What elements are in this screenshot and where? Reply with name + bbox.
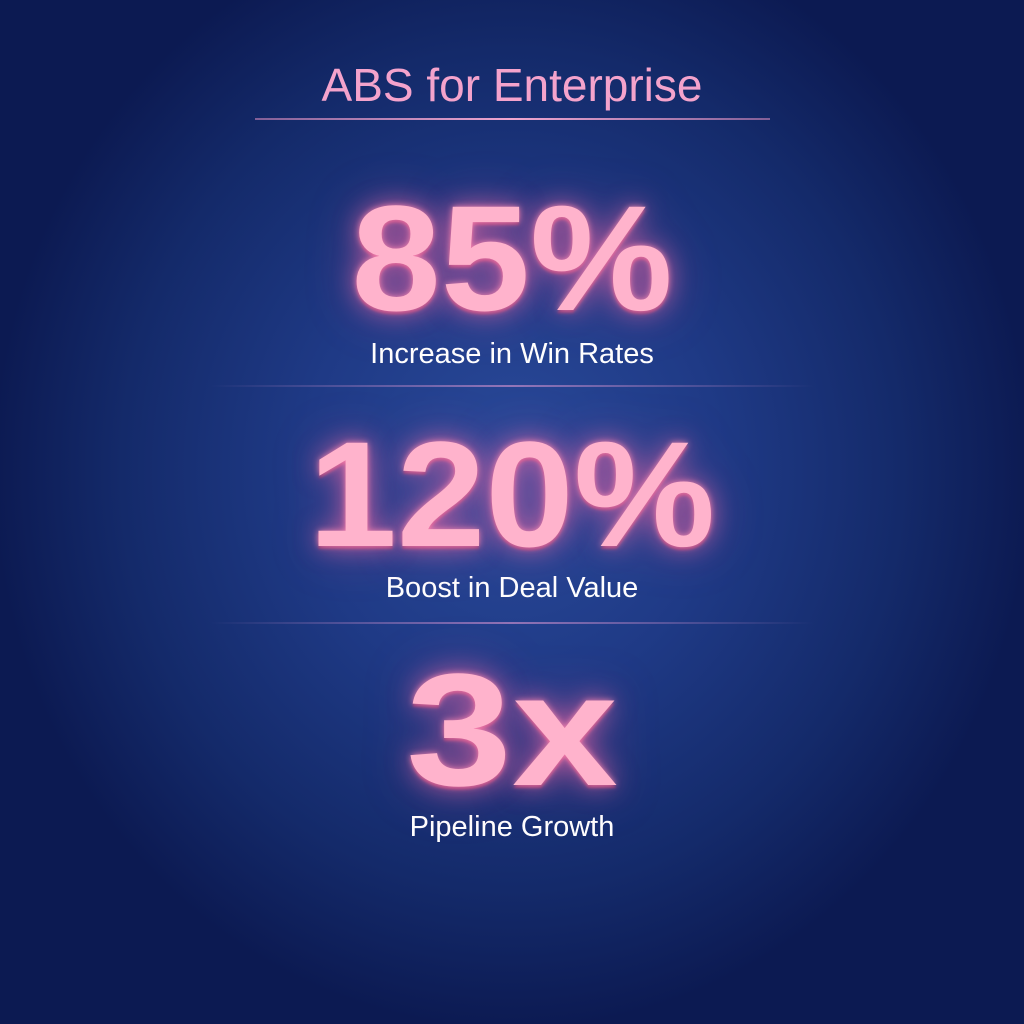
number 3x: 3x bbox=[406, 640, 618, 819]
number 120%: 120% bbox=[309, 410, 715, 578]
title: ABS for Enterprise bbox=[322, 59, 702, 111]
stat 1 bbox=[332, 174, 692, 370]
title underline bbox=[255, 118, 770, 120]
stat 2 bbox=[300, 410, 734, 604]
label: Pipeline Growth bbox=[410, 811, 614, 843]
stat 3 bbox=[390, 640, 632, 843]
number 85%: 85% bbox=[351, 174, 673, 342]
label: Boost in Deal Value bbox=[386, 572, 638, 604]
label: Increase in Win Rates bbox=[370, 338, 654, 370]
